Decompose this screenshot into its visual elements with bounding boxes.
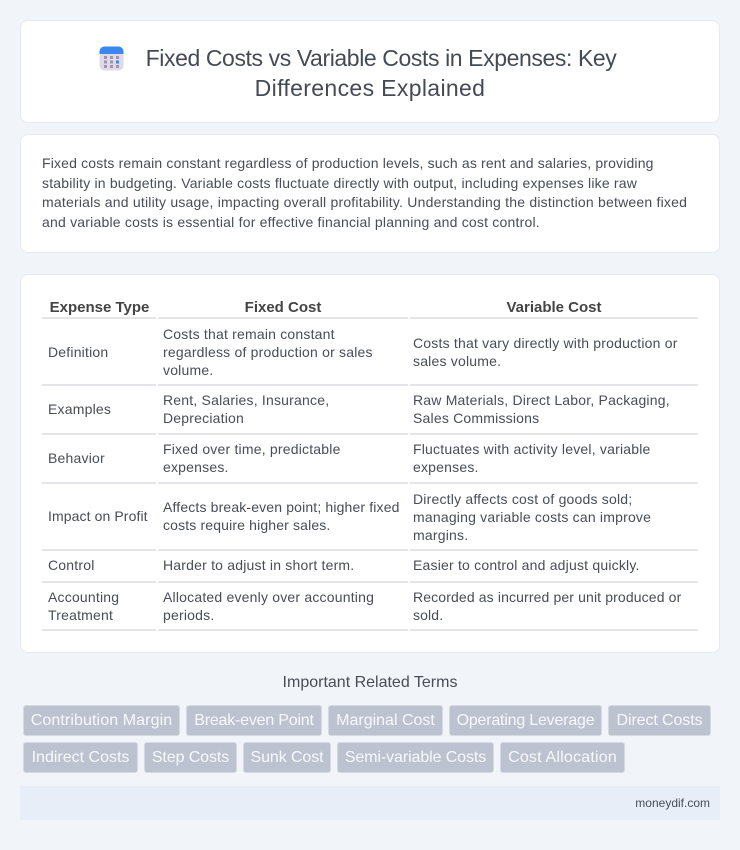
row: impact on profit: margins. bbox=[413, 527, 468, 543]
row: impact on profit: Directly affects cost of goods sold; bbox=[413, 491, 632, 507]
row: definition: regardless of production or sales bbox=[163, 344, 373, 360]
row: definition: volume. bbox=[163, 362, 213, 378]
row: examples: Rent, Salaries, Insurance, bbox=[163, 392, 329, 408]
panel: comparison table bbox=[20, 274, 720, 653]
intro text bbox=[42, 155, 687, 230]
related terms chips: Semi-variable Costs bbox=[345, 749, 486, 766]
table header: Fixed Cost bbox=[245, 299, 321, 316]
row: accounting treatment: Accounting bbox=[48, 589, 119, 605]
row: behavior: Fixed over time, predictable bbox=[163, 441, 341, 457]
row: accounting treatment: Recorded as incurred per unit produced or bbox=[413, 589, 681, 605]
row: control: Easier to control and adjust quickly. bbox=[413, 557, 640, 573]
row: accounting treatment: Allocated evenly over accounting bbox=[163, 589, 374, 605]
table header: Expense Type bbox=[50, 299, 149, 316]
row: control: Control bbox=[48, 557, 95, 573]
row: definition: Costs that remain constant bbox=[163, 326, 335, 342]
row: accounting treatment: periods. bbox=[163, 607, 214, 623]
row: behavior bbox=[42, 441, 698, 484]
row: accounting treatment bbox=[42, 589, 698, 631]
row: examples: Sales Commissions bbox=[413, 410, 539, 426]
row: definition: Definition bbox=[48, 344, 108, 360]
row: control bbox=[42, 557, 698, 583]
row: behavior: expenses. bbox=[413, 459, 479, 475]
footer source: moneydif.com bbox=[635, 796, 710, 810]
related terms chips: Break-even Point bbox=[194, 712, 314, 729]
related terms chips bbox=[23, 705, 711, 773]
related terms chips: Cost Allocation bbox=[508, 749, 617, 766]
row: examples: Depreciation bbox=[163, 410, 244, 426]
row: impact on profit bbox=[42, 491, 698, 551]
table header bbox=[42, 299, 698, 319]
intro text: Fixed costs remain constant regardless of production levels, such as rent and salaries, providing bbox=[42, 155, 654, 171]
icon: calendar bbox=[100, 46, 124, 70]
row: definition bbox=[42, 326, 698, 386]
row: impact on profit: Impact on Profit bbox=[48, 508, 148, 524]
related terms heading: Important Related Terms bbox=[283, 674, 457, 691]
row: impact on profit: Affects break-even point; higher fixed bbox=[163, 499, 400, 515]
row: accounting treatment: Treatment bbox=[48, 607, 113, 623]
intro text: materials and utility usage, impacting overall profitability. Understanding the distinction between fixed bbox=[42, 194, 687, 210]
row: definition: Costs that vary directly with production or bbox=[413, 335, 678, 351]
row: accounting treatment: sold. bbox=[413, 607, 443, 623]
related terms chips: Marginal Cost bbox=[336, 712, 435, 729]
row: behavior: Fluctuates with activity level, variable bbox=[413, 441, 651, 457]
row: impact on profit: managing variable costs can improve bbox=[413, 509, 651, 525]
related terms chips: Direct Costs bbox=[617, 712, 702, 729]
row: control: Harder to adjust in short term. bbox=[163, 557, 354, 573]
related terms chips: Indirect Costs bbox=[32, 749, 129, 766]
title text: Fixed Costs vs Variable Costs in Expenses: Key bbox=[146, 45, 616, 71]
row: examples bbox=[42, 392, 698, 435]
row: behavior: expenses. bbox=[163, 459, 229, 475]
row: definition: sales volume. bbox=[413, 353, 501, 369]
panel: title bbox=[20, 20, 720, 123]
title text bbox=[146, 45, 617, 101]
footer bbox=[20, 786, 720, 820]
row: behavior: Behavior bbox=[48, 450, 105, 466]
related terms chips: Sunk Cost bbox=[251, 749, 323, 766]
related terms chips: Operating Leverage bbox=[457, 712, 594, 729]
intro text: and variable costs is essential for effective financial planning and cost control. bbox=[42, 214, 540, 230]
panel: introduction bbox=[20, 134, 720, 253]
row: examples: Raw Materials, Direct Labor, Packaging, bbox=[413, 392, 670, 408]
related terms chips: Step Costs bbox=[152, 749, 229, 766]
table header: Variable Cost bbox=[506, 299, 602, 316]
row: examples: Examples bbox=[48, 401, 111, 417]
related terms chips: Contribution Margin bbox=[31, 712, 172, 729]
intro text: stability in budgeting. Variable costs fluctuate directly with output, including expenses like raw bbox=[42, 174, 637, 190]
row: impact on profit: costs require higher sales. bbox=[163, 517, 330, 533]
title text: Differences Explained bbox=[255, 75, 485, 101]
